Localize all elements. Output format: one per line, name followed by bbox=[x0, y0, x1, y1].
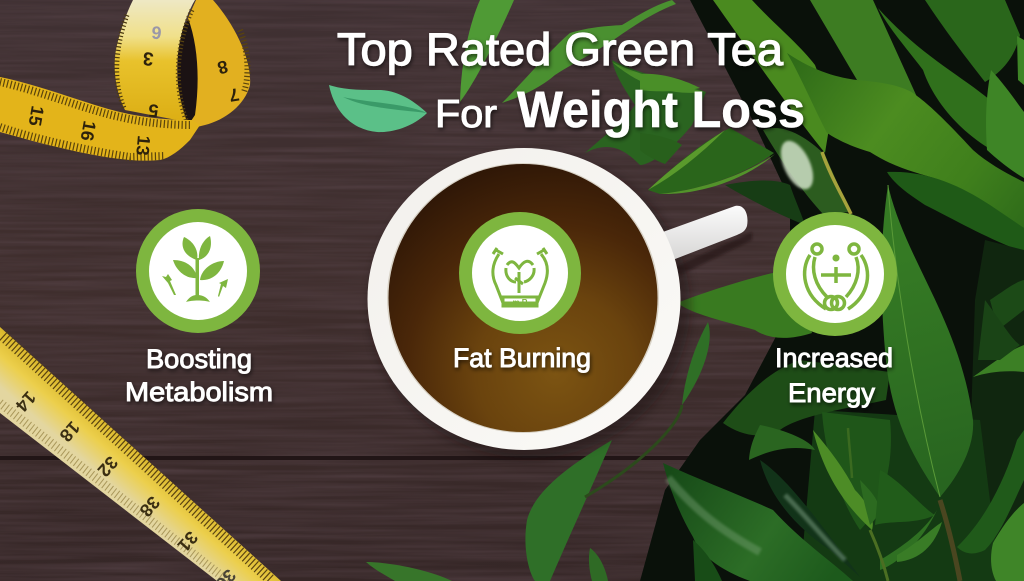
icon: fat burning emblem bbox=[493, 248, 547, 307]
measuring tape: top left: 3 bbox=[142, 47, 154, 69]
measuring tape: top left: 16 bbox=[77, 119, 100, 143]
tea leaves: top right cluster bbox=[640, 0, 1024, 252]
label: boosting metabolism: Metabolism bbox=[125, 377, 273, 407]
label: increased energy bbox=[775, 343, 893, 408]
dark foliage backdrop bbox=[640, 0, 1024, 581]
title: Weight Loss bbox=[517, 81, 805, 138]
measuring tape: top left: 15 bbox=[25, 104, 48, 128]
title bbox=[337, 24, 805, 138]
icon: fat burning emblem: m R bbox=[512, 298, 528, 307]
label: increased energy: Energy bbox=[788, 378, 875, 408]
measuring tape: bottom left: 38 bbox=[136, 492, 164, 521]
label: boosting metabolism bbox=[125, 344, 273, 407]
label: fat burning: Fat Burning bbox=[453, 343, 591, 373]
tea leaves: title area and bottom left bbox=[366, 0, 706, 581]
measuring tape: top left bbox=[0, 0, 250, 161]
tea leaves: centre right and bottom cluster bbox=[585, 185, 1024, 581]
measuring tape: top left: 6 bbox=[151, 22, 162, 43]
badge: boosting metabolism bbox=[125, 209, 273, 407]
icon: title leaf bbox=[329, 85, 427, 132]
measuring tape: top left: 8 bbox=[215, 56, 230, 78]
title: Top Rated Green Tea bbox=[337, 24, 784, 75]
badge: increased energy bbox=[773, 212, 897, 408]
measuring tape: bottom left bbox=[0, 327, 281, 581]
measuring tape: bottom left: 18 bbox=[56, 417, 84, 446]
title: For bbox=[435, 93, 497, 136]
icon: energy symbol bbox=[805, 244, 868, 310]
measuring tape: top left: 5 bbox=[148, 100, 159, 121]
measuring tape: bottom left: 14 bbox=[12, 387, 40, 416]
tea cup bbox=[368, 148, 752, 458]
measuring tape: bottom left: 31 bbox=[174, 527, 202, 556]
measuring tape: top left: 13 bbox=[132, 135, 154, 156]
cup handle bbox=[660, 206, 752, 275]
badge: fat burning bbox=[453, 212, 591, 373]
measuring tape: bottom left: 32 bbox=[94, 452, 122, 481]
label: increased energy: Increased bbox=[775, 343, 893, 373]
label: boosting metabolism: Boosting bbox=[146, 344, 252, 374]
icon: sprout with arrows bbox=[162, 236, 228, 302]
measuring tape: top left: 7 bbox=[227, 84, 241, 105]
